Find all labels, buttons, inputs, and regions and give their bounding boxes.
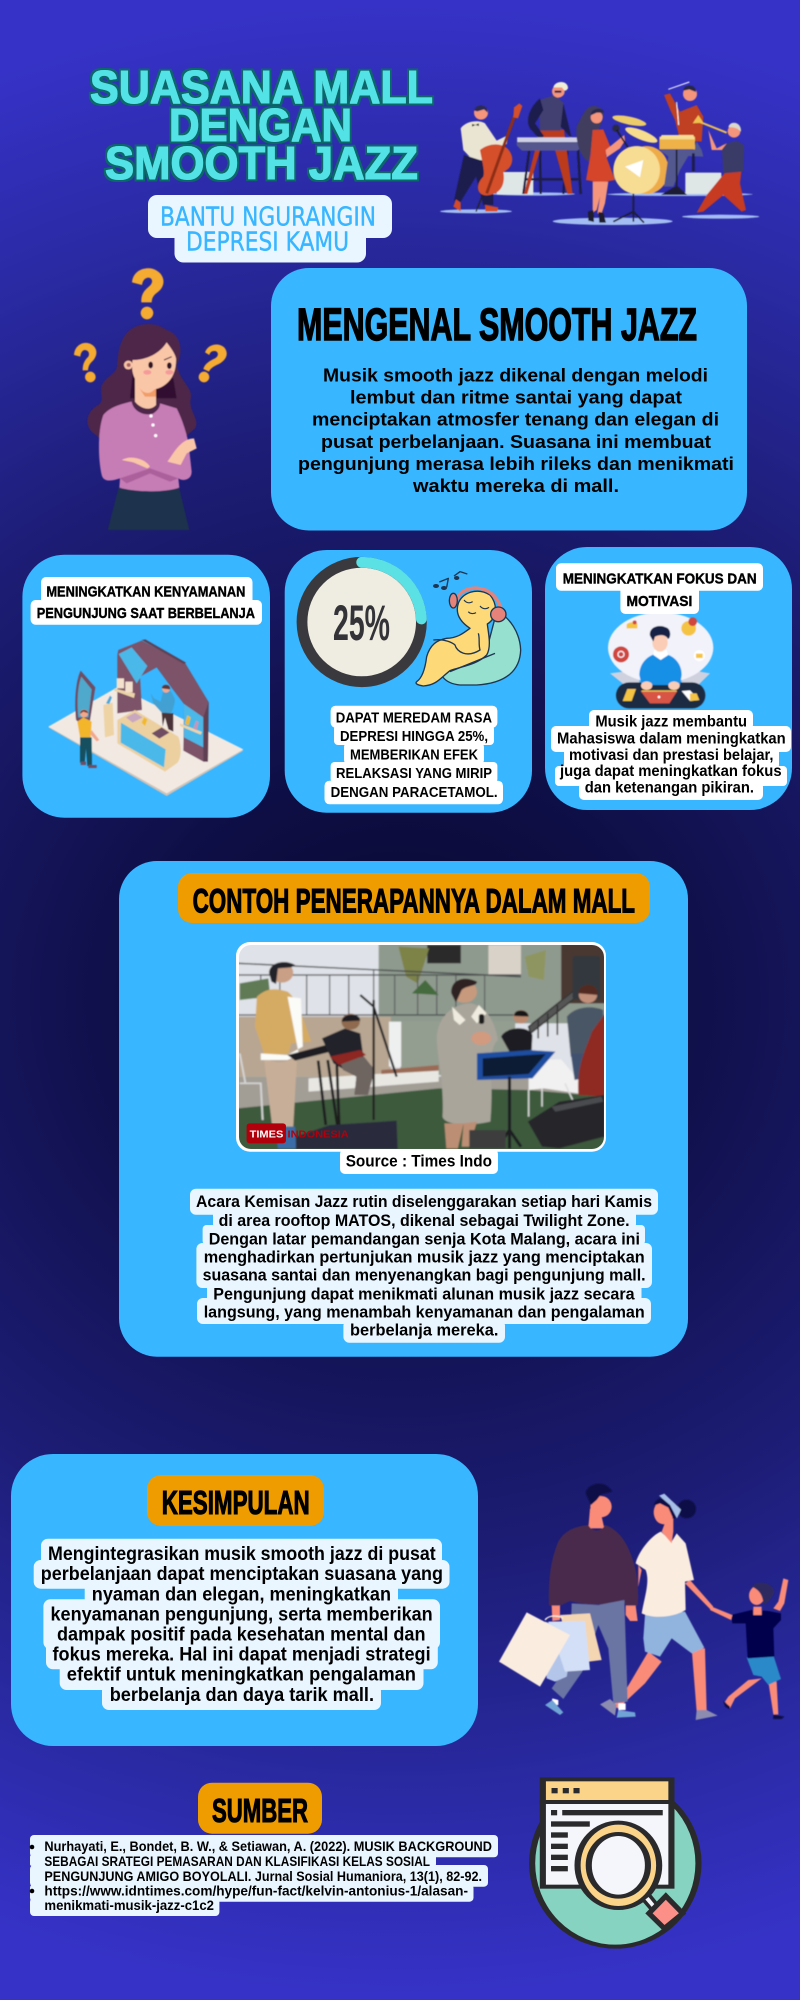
text pills: Musik jazz membantu bbox=[595, 714, 747, 731]
body text: suasana santai dan menyenangkan bagi pengunjung mall. bbox=[203, 1266, 646, 1284]
text pills: motivasi dan prestasi belajar, bbox=[569, 747, 774, 764]
photo: live jazz: TIMES bbox=[250, 1129, 283, 1140]
heading badge bbox=[198, 1783, 322, 1834]
body text: perbelanjaan dapat menciptakan suasana yang bbox=[41, 1563, 443, 1585]
panel: contoh penerapan bbox=[119, 861, 688, 1357]
body text: di area rooftop MATOS, dikenal sebagai Twilight Zone. bbox=[219, 1212, 630, 1230]
photo caption bbox=[340, 1149, 498, 1174]
subtitle pill: BANTU NGURANGIN bbox=[160, 202, 376, 232]
body text: pusat perbelanjaan. Suasana ini membuat bbox=[321, 431, 711, 452]
text pills: Mahasiswa dalam meningkatkan bbox=[557, 730, 786, 747]
heading pill: MENINGKATKAN FOKUS DAN bbox=[563, 570, 757, 587]
reference list: https://www.idntimes.com/hype/fun-fact/kelvin-antonius-1/alasan- bbox=[44, 1882, 468, 1898]
title bbox=[90, 61, 433, 189]
title: SMOOTH JAZZ bbox=[105, 137, 418, 189]
illustration: shopping family bbox=[499, 1484, 788, 1720]
heading pill bbox=[556, 563, 763, 614]
body text: Pengunjung dapat menikmati alunan musik jazz secara bbox=[213, 1285, 635, 1303]
reference list bbox=[30, 1835, 498, 1916]
illustration: relaxed listener bbox=[416, 572, 521, 686]
heading pill: PENGUNJUNG SAAT BERBELANJA bbox=[37, 605, 255, 622]
body text: Mengintegrasikan musik smooth jazz di pusat bbox=[48, 1543, 436, 1565]
body text: Acara Kemisan Jazz rutin diselenggarakan setiap hari Kamis bbox=[196, 1193, 652, 1211]
body text: fokus mereka. Hal ini dapat menjadi strategi bbox=[52, 1644, 431, 1666]
donut chart: 25% bbox=[333, 595, 390, 651]
subtitle pill bbox=[148, 195, 392, 262]
heading pill bbox=[31, 577, 262, 625]
heading pill: MOTIVASI bbox=[626, 593, 692, 610]
heading badge bbox=[178, 873, 650, 923]
body text: Musik smooth jazz dikenal dengan melodi bbox=[323, 364, 708, 386]
heading badge: SUMBER bbox=[212, 1792, 308, 1829]
text pills: DAPAT MEREDAM RASA bbox=[336, 710, 492, 726]
body text: berbelanja dan daya tarik mall. bbox=[110, 1684, 374, 1706]
body text: Dengan latar pemandangan senja Kota Malang, acara ini bbox=[209, 1230, 640, 1248]
body text bbox=[298, 364, 734, 496]
panel: fokus dan motivasi bbox=[545, 547, 792, 810]
text pills: RELAKSASI YANG MIRIP bbox=[336, 766, 492, 782]
panel: mengenal smooth jazz bbox=[271, 268, 747, 530]
text pills: dan ketenangan pikiran. bbox=[585, 780, 754, 797]
body text bbox=[34, 1539, 449, 1710]
text pills: juga dapat meningkatkan fokus bbox=[559, 763, 782, 780]
body text: pengunjung merasa lebih rileks dan menikmati bbox=[298, 453, 734, 474]
heading pill: MENINGKATKAN KENYAMANAN bbox=[46, 584, 245, 600]
illustration: exhibition booth bbox=[48, 639, 243, 796]
text pills: MEMBERIKAN EFEK bbox=[350, 747, 478, 763]
body text: berbelanja mereka. bbox=[350, 1321, 498, 1339]
body text bbox=[190, 1189, 658, 1343]
body text: lembut dan ritme santai yang dapat bbox=[350, 387, 682, 408]
panel: 25 percent bbox=[285, 550, 532, 813]
title: DENGAN bbox=[169, 99, 352, 151]
photo caption: Source : Times Indo bbox=[346, 1153, 492, 1171]
panel: kesimpulan bbox=[11, 1454, 478, 1746]
heading badge: KESIMPULAN bbox=[162, 1484, 310, 1521]
donut chart bbox=[302, 562, 421, 682]
body text: dampak positif pada kesehatan mental dan bbox=[57, 1623, 426, 1645]
reference list: PENGUNJUNG AMIGO BOYOLALI. Jurnal Sosial Humaniora, 13(1), 82-92. bbox=[44, 1868, 482, 1884]
subtitle pill: DEPRESI KAMU bbox=[186, 228, 349, 258]
illustration: focused student bbox=[608, 612, 713, 708]
body text: efektif untuk meningkatkan pengalaman bbox=[67, 1664, 416, 1686]
illustration: jazz band bbox=[440, 82, 759, 225]
body text: kenyamanan pengunjung, serta memberikan bbox=[50, 1603, 433, 1625]
text pills bbox=[324, 706, 503, 804]
body text: menciptakan atmosfer tenang dan elegan di bbox=[312, 409, 719, 430]
body text: waktu mereka di mall. bbox=[412, 475, 619, 496]
panel: meningkatkan kenyamanan bbox=[22, 555, 270, 818]
photo: live jazz bbox=[236, 942, 608, 1152]
text pills bbox=[551, 710, 791, 800]
heading badge bbox=[147, 1475, 324, 1526]
reference list: menikmati-musik-jazz-c1c2 bbox=[44, 1897, 214, 1913]
body text: nyaman dan elegan, meningkatkan bbox=[92, 1583, 391, 1605]
text pills: DENGAN PARACETAMOL. bbox=[331, 785, 498, 801]
icon: magnifier on document bbox=[532, 1779, 698, 1947]
body text: langsung, yang menambah kenyamanan dan pengalaman bbox=[204, 1303, 645, 1321]
illustration: confused woman bbox=[74, 268, 227, 530]
text pills: DEPRESI HINGGA 25%, bbox=[340, 729, 488, 745]
body text: menghadirkan pertunjukan musik jazz yang menciptakan bbox=[204, 1248, 645, 1266]
photo: live jazz: INDONESIA bbox=[288, 1129, 349, 1140]
sumber section bbox=[30, 1783, 498, 1916]
title: SUASANA MALL bbox=[90, 61, 433, 113]
reference list: SEBAGAI SRATEGI PEMASARAN DAN KLASIFIKASI KELAS SOSIAL bbox=[44, 1853, 430, 1869]
reference list: Nurhayati, E., Bondet, B. W., & Setiawan, A. (2022). MUSIK BACKGROUND bbox=[44, 1838, 492, 1854]
